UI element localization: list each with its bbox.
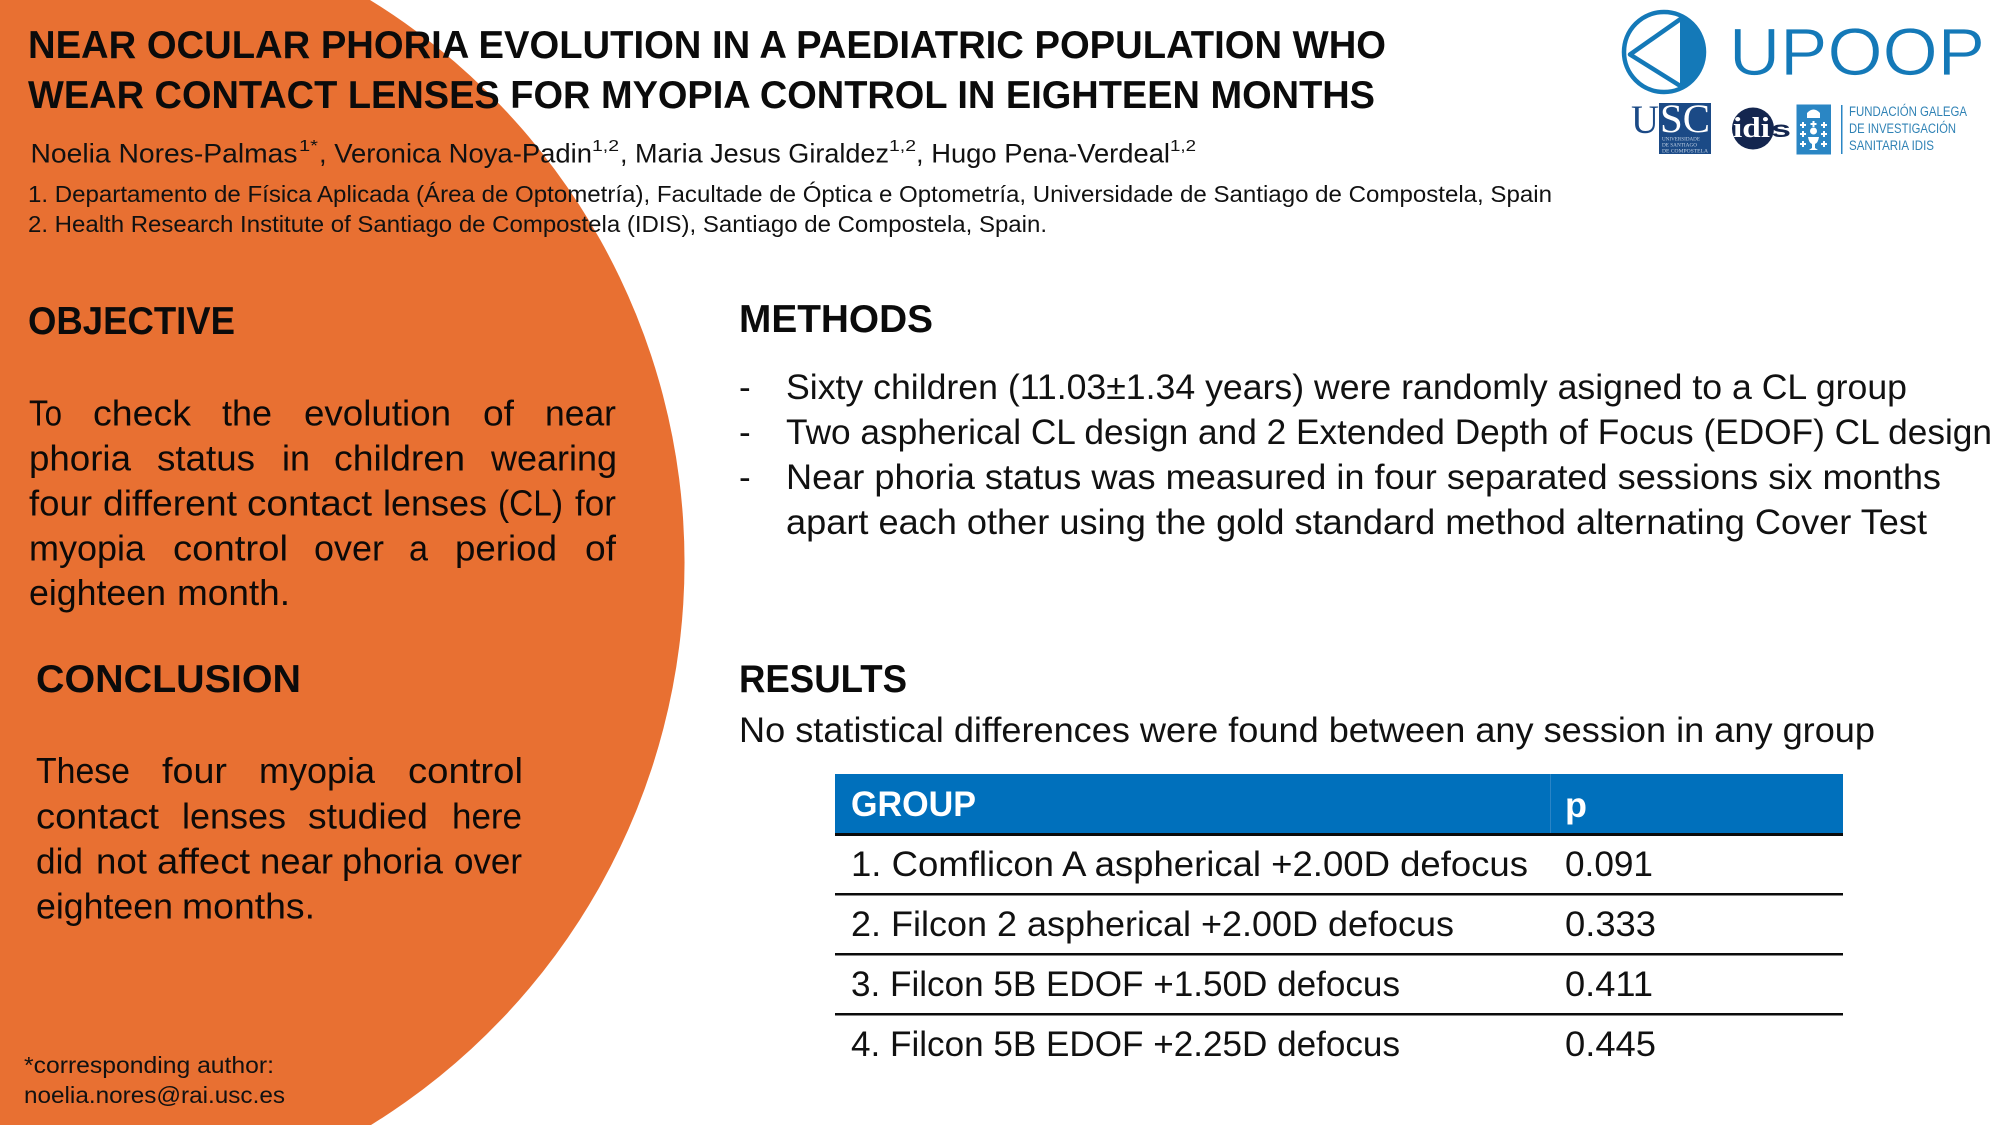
authors: Noelia Nores-Palmas	[30, 138, 298, 168]
conclusion paragraph: contact	[36, 796, 159, 836]
results summary: No statistical differences were found between any session in any group	[739, 711, 1875, 750]
heading: methods: METHODS	[739, 298, 933, 341]
conclusion paragraph: over	[454, 840, 522, 882]
authors: , Veronica Noya-Padin	[319, 138, 592, 168]
table rows: 2. Filcon 2 aspherical +2.00D defocus	[851, 905, 1454, 944]
logo: USC: UNIVERSIDADE	[1662, 136, 1701, 142]
authors	[30, 138, 1196, 168]
conclusion paragraph: myopia	[259, 750, 376, 791]
heading: results: RESULTS	[739, 658, 907, 701]
conclusion paragraph: eighteen	[36, 886, 173, 926]
table header: GROUP	[851, 785, 976, 824]
table rows: 4. Filcon 5B EDOF +2.25D defocus	[851, 1025, 1400, 1064]
objective paragraph: of	[585, 528, 617, 568]
logo: USC	[1631, 96, 1711, 154]
conclusion paragraph: lenses	[182, 796, 286, 836]
table rows: 0.411	[1565, 965, 1653, 1004]
table rules	[835, 833, 1843, 1016]
conclusion paragraph: near	[260, 840, 333, 882]
objective paragraph: over	[314, 528, 384, 568]
objective paragraph: myopia	[29, 528, 146, 568]
objective paragraph: different	[103, 482, 237, 524]
objective paragraph: of	[483, 392, 515, 434]
logo: foundation name: DE INVESTIGACIÓN	[1849, 121, 1956, 136]
objective paragraph: for	[575, 482, 616, 524]
methods list: apart each other using the gold standard method alternating Cover Test	[786, 503, 1927, 542]
corresponding author note: *corresponding author:	[24, 1052, 274, 1078]
conclusion paragraph: affect	[157, 840, 250, 882]
conclusion paragraph: control	[408, 750, 523, 791]
objective paragraph: period	[455, 528, 557, 568]
objective paragraph: contact	[247, 482, 372, 524]
table rows: 3. Filcon 5B EDOF +1.50D defocus	[851, 965, 1400, 1004]
affiliations	[28, 181, 1552, 237]
logo: Galicia emblem	[1796, 104, 1831, 154]
logo: UPOOP emblem	[1624, 12, 1704, 92]
objective paragraph: a	[409, 528, 429, 568]
methods list: Sixty children (11.03±1.34 years) were randomly asigned to a CL group	[786, 368, 1907, 407]
logo: USC: SC	[1660, 96, 1710, 141]
table rows	[851, 845, 1656, 1064]
conclusion paragraph: months.	[182, 886, 315, 926]
logo: UPOOP wordmark: UPOOP	[1729, 15, 1985, 90]
logo: idis: s	[1771, 116, 1791, 142]
objective paragraph: four	[29, 482, 92, 524]
objective paragraph: eighteen	[29, 572, 166, 613]
objective paragraph: the	[222, 392, 272, 434]
logo: foundation name: FUNDACIÓN GALEGA	[1849, 104, 1967, 119]
authors: 1,2	[1170, 138, 1196, 155]
objective paragraph: near	[545, 392, 616, 434]
logo: USC: DE COMPOSTELA	[1662, 148, 1708, 154]
authors: 1,2	[889, 138, 916, 155]
methods list: -	[739, 458, 751, 497]
logo: USC: DE SANTIAGO	[1662, 142, 1697, 148]
conclusion paragraph: four	[162, 750, 227, 791]
table rows: 0.091	[1565, 845, 1653, 884]
corresponding author note	[24, 1052, 285, 1108]
conclusion paragraph: These	[36, 750, 130, 791]
objective paragraph: in	[282, 438, 310, 478]
objective paragraph: control	[173, 528, 288, 568]
heading: objective: OBJECTIVE	[28, 300, 235, 343]
table rows: 1. Comflicon A aspherical +2.00D defocus	[851, 845, 1528, 884]
objective paragraph	[29, 392, 617, 613]
objective paragraph: (CL)	[498, 482, 563, 524]
objective paragraph: check	[93, 392, 192, 434]
table rows: 0.445	[1565, 1025, 1656, 1064]
conclusion paragraph	[36, 750, 523, 926]
heading: conclusion: CONCLUSION	[36, 658, 301, 701]
title: WEAR CONTACT LENSES FOR MYOPIA CONTROL IN EIGHTEEN MONTHS	[28, 74, 1375, 117]
methods list: Two aspherical CL design and 2 Extended Depth of Focus (EDOF) CL design	[786, 413, 1992, 452]
conclusion paragraph: phoria	[342, 840, 444, 882]
objective paragraph: To	[29, 392, 62, 434]
title: NEAR OCULAR PHORIA EVOLUTION IN A PAEDIATRIC POPULATION WHO	[28, 24, 1386, 67]
logo: foundation name	[1849, 104, 1967, 153]
methods list: -	[739, 413, 751, 452]
logo: foundation name: SANITARIA IDIS	[1849, 138, 1934, 153]
methods list	[739, 368, 1992, 542]
corresponding author note: noelia.nores@rai.usc.es	[24, 1082, 285, 1108]
objective paragraph: wearing	[490, 438, 617, 478]
objective paragraph: month.	[177, 572, 290, 613]
authors: 1,2	[592, 138, 619, 155]
orange circle background	[0, 0, 685, 1125]
logos	[1624, 12, 1985, 154]
title	[28, 24, 1386, 117]
objective paragraph: phoria	[29, 438, 132, 478]
logo: USC: U	[1631, 97, 1659, 142]
conclusion paragraph: not	[96, 840, 147, 882]
results table	[835, 774, 1843, 1064]
authors: 1*	[299, 138, 318, 155]
logo: idis	[1732, 108, 1791, 150]
authors: , Hugo Pena-Verdeal	[916, 138, 1170, 168]
objective paragraph: status	[157, 438, 255, 478]
table header	[835, 774, 1843, 834]
objective paragraph: children	[334, 438, 465, 478]
logo: idis: idi	[1733, 113, 1770, 144]
table header: p	[1565, 786, 1587, 825]
logo divider	[1841, 105, 1842, 154]
methods list: Near phoria status was measured in four separated sessions six months	[786, 458, 1941, 497]
table rows: 0.333	[1565, 905, 1656, 944]
objective paragraph: lenses	[383, 482, 487, 524]
conclusion paragraph: here	[452, 796, 522, 836]
objective paragraph: evolution	[304, 392, 451, 434]
methods list: -	[739, 368, 751, 407]
affiliations: 1. Departamento de Física Aplicada (Área de Optometría), Facultade de Óptica e Optometría, Universidade de Santiago de Compostela, Spain	[28, 181, 1552, 207]
affiliations: 2. Health Research Institute of Santiago de Compostela (IDIS), Santiago de Compostela, Spain.	[28, 211, 1047, 237]
authors: , Maria Jesus Giraldez	[620, 138, 889, 168]
conclusion paragraph: did	[36, 840, 83, 882]
conclusion paragraph: studied	[308, 796, 428, 836]
